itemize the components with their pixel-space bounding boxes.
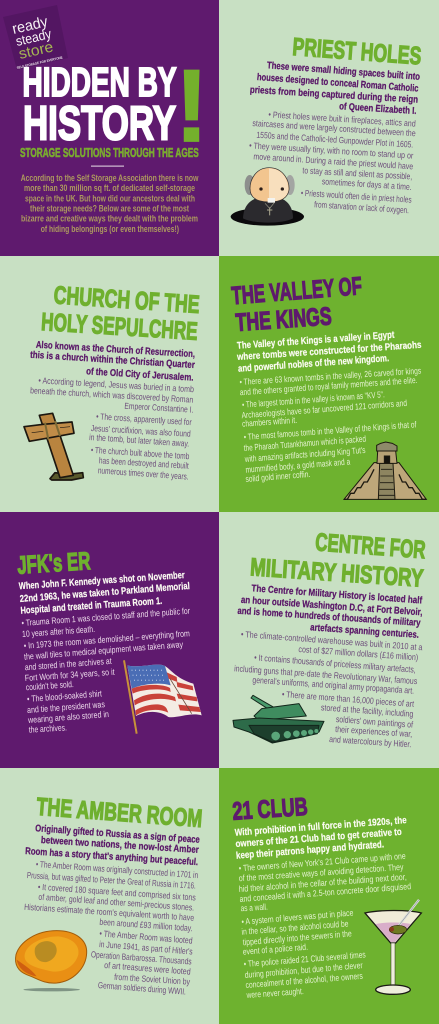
amber room bullets: been around £93 million today. bbox=[99, 917, 193, 933]
21 club intro bbox=[234, 815, 408, 862]
icon: amber stone bbox=[16, 931, 87, 991]
valley bullets: mummified body, a gold mask and a bbox=[245, 456, 351, 475]
church bullets: has been destroyed and rebuilt bbox=[99, 455, 189, 471]
logo bbox=[3, 5, 68, 70]
21 club bullets: • A system of levers was put in place bbox=[241, 908, 354, 927]
military bullets: their experiences of war, bbox=[335, 724, 413, 739]
valley bullets: solid gold inner coffin. bbox=[245, 469, 311, 484]
jfk bullets: the wall tiles to medical equipment was taken away bbox=[24, 639, 184, 662]
amber room intro: Originally gifted to Russia as a sign of peace bbox=[35, 823, 201, 846]
church intro: of the Old City of Jerusalem. bbox=[86, 366, 194, 384]
logo: SELF STORAGE FOR EVERYONE bbox=[16, 55, 64, 70]
21 club bullets: • The police raided 21 Club several times bbox=[243, 949, 367, 969]
intro text: their storage needs? Below are some of the most bbox=[30, 203, 189, 214]
military bullets: stored at the facility, including bbox=[321, 702, 414, 719]
jfk bullets: • Trauma Room 1 was closed to staff and the public for bbox=[21, 606, 190, 628]
amber room bullets bbox=[24, 859, 199, 997]
priest holes bullets: sometimes for days at a time. bbox=[322, 176, 412, 192]
21 club bullets: tipped directly into the sewers in the bbox=[242, 928, 352, 947]
amber room bullets: • The Amber Room was looted bbox=[99, 928, 193, 946]
jfk bullets: 10 years after his death. bbox=[22, 624, 95, 639]
amber room intro: Room has a story that's anything but peaceful. bbox=[25, 846, 199, 868]
heading: church of the holy sepulchre: CHURCH OF THE bbox=[53, 281, 200, 319]
priest holes intro: of Queen Elizabeth I. bbox=[339, 101, 417, 117]
jfk bullets: the archives. bbox=[29, 722, 67, 735]
heading: valley of the kings: THE VALLEY OF bbox=[231, 272, 363, 310]
jfk intro: When John F. Kennedy was shot on November bbox=[18, 570, 185, 592]
panel: 21 club bbox=[219, 768, 439, 1024]
church bullets: numerous times over the years. bbox=[98, 465, 189, 482]
panel: valley of the kings bbox=[219, 256, 439, 512]
church bullets: Emperor Constantine I. bbox=[124, 401, 194, 415]
21 club bullets: as a wall. bbox=[240, 902, 268, 913]
jfk bullets: couldn't be sold. bbox=[25, 679, 74, 692]
heading: jfk's er: JFK's ER bbox=[16, 547, 91, 580]
amber room bullets: of amber, gold leaf and other semi-precious stones. bbox=[38, 892, 194, 913]
valley bullets: with amazing artifacts including King Tut's bbox=[244, 445, 366, 464]
jfk intro: 22nd 1963, he was taken to Parkland Memorial bbox=[19, 581, 190, 605]
valley intro: The Valley of the Kings is a valley in Egypt bbox=[237, 330, 395, 352]
church bullets: • The cross, apparently used for bbox=[96, 411, 192, 427]
logo: store bbox=[17, 38, 55, 63]
heading: hidden by history bbox=[22, 59, 176, 150]
icon: wooden cross bbox=[24, 413, 83, 480]
heading: centre for military history bbox=[249, 528, 427, 593]
21 club bullets bbox=[238, 851, 411, 1000]
heading: valley of the kings: THE KINGS bbox=[235, 302, 332, 337]
panel: title bbox=[0, 0, 219, 256]
amber room bullets: Operation Barbarossa. Thousands bbox=[91, 949, 192, 967]
icon: pyramid temple bbox=[344, 442, 426, 499]
intro text: more than 30 million sq ft. of dedicated self-storage bbox=[24, 182, 195, 193]
panel: centre for military history bbox=[219, 512, 439, 768]
amber room bullets: German soldiers during WWII. bbox=[98, 980, 186, 997]
amber room bullets: • The Amber Room was originally constructed in 1701 in bbox=[36, 859, 199, 880]
21 club bullets: in the cellar, so the alcohol could be bbox=[241, 918, 349, 937]
intro text: bizarre and creative ways they dealt with the problem bbox=[21, 213, 198, 224]
jfk bullets: and stored in the archives at bbox=[24, 656, 112, 672]
church bullets: Jesus' crucifixion, was also found bbox=[91, 423, 191, 439]
21 club bullets: were never caught. bbox=[245, 986, 304, 1000]
icon: martini glass bbox=[365, 900, 421, 994]
heading: the amber room: THE AMBER ROOM bbox=[36, 793, 203, 833]
valley intro bbox=[236, 330, 422, 375]
amber room bullets: of art treasures were looted bbox=[104, 960, 191, 977]
jfk bullets: Fort Worth for 34 years, so it bbox=[24, 667, 115, 683]
amber room intro: between two nations, the now-lost Amber bbox=[41, 835, 199, 856]
21 club bullets: event of a police raid. bbox=[242, 942, 308, 957]
amber room bullets: from the Soviet Union by bbox=[114, 972, 191, 987]
heading: hidden by history: HIDDEN BY bbox=[22, 59, 176, 105]
priest holes intro bbox=[250, 60, 420, 117]
jfk bullets: wearing are also stored in bbox=[27, 709, 109, 725]
military bullets bbox=[234, 629, 423, 749]
21 club intro: owners of the 21 Club had to get creative to bbox=[235, 827, 402, 850]
intro text bbox=[21, 172, 199, 234]
priest holes bullets bbox=[249, 109, 416, 215]
heading: church of the holy sepulchre bbox=[40, 281, 200, 346]
21 club intro: keep their patrons happy and hydrated. bbox=[236, 839, 385, 862]
valley bullets: the Pharaoh Tutankhamun which is packed bbox=[243, 434, 366, 453]
amber room intro bbox=[25, 823, 201, 868]
jfk bullets: • In 1973 the room was demolished – everything from bbox=[23, 628, 190, 651]
church bullets: • According to legend, Jesus was buried in a tomb bbox=[38, 375, 194, 394]
panel: the amber room bbox=[0, 768, 219, 1024]
heading: valley of the kings bbox=[231, 272, 363, 337]
logo: ready bbox=[11, 13, 50, 38]
amber room bullets: Historians estimate the room's equivalent worth to have bbox=[24, 902, 195, 923]
jfk bullets: • The blood-soaked shirt bbox=[27, 688, 103, 704]
heading: church of the holy sepulchre: HOLY SEPULCHRE bbox=[40, 308, 198, 346]
panel: priest holes bbox=[219, 0, 439, 256]
21 club intro: With prohibition in full force in the 1920s, the bbox=[234, 815, 408, 839]
intro text: According to the Self Storage Association there is now bbox=[21, 172, 199, 183]
amber room bullets: Prussia, but was gifted to Peter the Great of Russia in 1716. bbox=[27, 870, 196, 891]
church bullets: beneath the church, which was discovered by Roman bbox=[30, 385, 194, 405]
heading: hidden by history: HISTORY bbox=[23, 96, 176, 150]
subtitle: STORAGE SOLUTIONS THROUGH THE AGES bbox=[20, 146, 199, 160]
jfk intro: Hospital and treated in Trauma Room 1. bbox=[20, 596, 163, 617]
jfk intro bbox=[18, 570, 190, 617]
military bullets: soldiers' own paintings of bbox=[336, 714, 414, 730]
amber room bullets: in June 1941, as part of Hitler's bbox=[99, 939, 193, 957]
icon: american flag bbox=[124, 660, 202, 734]
church bullets: in the tomb, but later taken away. bbox=[89, 432, 190, 449]
church intro: Also known as the Church of Resurrection, bbox=[36, 340, 196, 360]
valley bullets: chambers within it. bbox=[242, 415, 297, 429]
logo: steady bbox=[14, 26, 53, 49]
military bullets: and watercolours by Hitler. bbox=[329, 734, 412, 749]
icon: priest in a hole bbox=[231, 168, 304, 226]
heading: 21 club: 21 CLUB bbox=[232, 793, 309, 826]
valley bullets: • The largest tomb in the valley is known as "KV 5". bbox=[242, 389, 385, 410]
church bullets: • The church built above the tomb bbox=[91, 445, 190, 461]
jfk bullets bbox=[21, 606, 190, 735]
military intro bbox=[237, 583, 423, 641]
panel: jfk's er bbox=[0, 512, 219, 768]
intro text: space in the UK. But how did our ancestors deal with bbox=[25, 193, 195, 204]
21 club bullets: concealment of the alcohol, the owners bbox=[245, 971, 364, 990]
amber room bullets: • It covered 180 square feet and comprised six tons bbox=[38, 882, 197, 902]
valley bullets bbox=[239, 366, 422, 484]
21 club bullets: during prohibition, but due to the clever bbox=[244, 960, 363, 980]
valley intro: and powerful nobles of the new kingdom. bbox=[238, 353, 390, 375]
church intro bbox=[30, 340, 196, 384]
intro text: of hiding belongings (or even themselves!) bbox=[41, 223, 179, 234]
jfk bullets: and tie the president was bbox=[27, 699, 106, 715]
church bullets bbox=[30, 375, 194, 482]
panel: church of the holy sepulchre bbox=[0, 256, 219, 512]
icon: tank bbox=[233, 695, 324, 743]
exclamation mark: ! bbox=[174, 48, 209, 164]
church intro: this is a church within the Christian Quarter bbox=[30, 350, 195, 371]
